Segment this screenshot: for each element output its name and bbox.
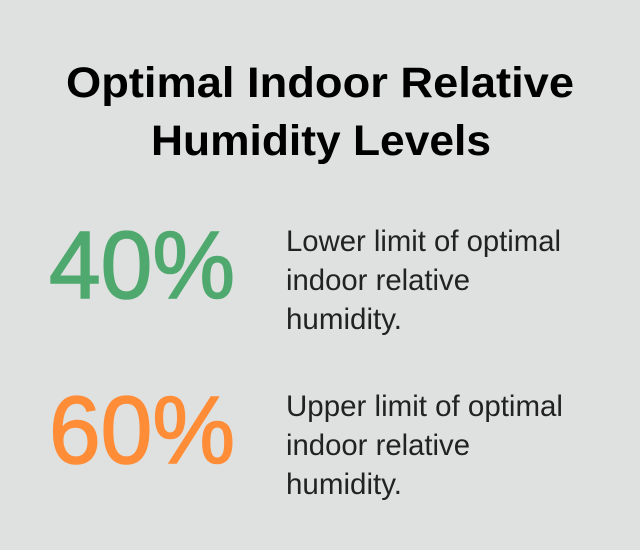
stat: 60% upper limit [49, 377, 563, 501]
description: lower limit [286, 225, 561, 336]
title: Optimal Indoor Relative [66, 59, 574, 107]
value: 40%: 40% [49, 212, 235, 319]
description: upper limit: humidity. [286, 468, 402, 501]
description: upper limit: indoor relative [286, 429, 470, 462]
title: Humidity Levels [151, 117, 491, 165]
description: lower limit: Lower limit of optimal [286, 225, 561, 258]
description: upper limit [286, 390, 563, 501]
value: 60%: 60% [49, 377, 235, 484]
stat: 40% lower limit [49, 212, 561, 336]
description: lower limit: humidity. [286, 303, 402, 336]
description: lower limit: indoor relative [286, 264, 470, 297]
title [66, 59, 574, 165]
description: upper limit: Upper limit of optimal [286, 390, 563, 423]
